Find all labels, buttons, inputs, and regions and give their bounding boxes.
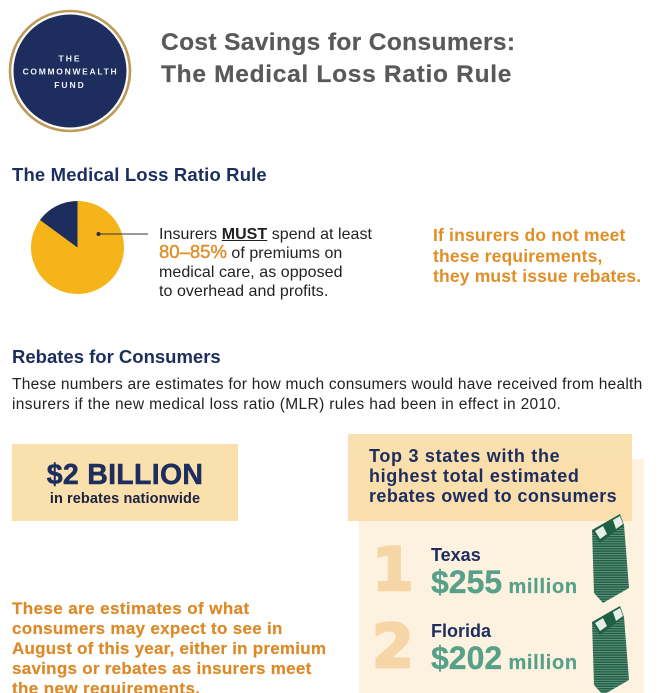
orange note: estimates: consumers may expect to see in [12,619,283,638]
rule explanation text [159,226,372,300]
rule explanation text: Insurers MUST spend at least [159,226,372,242]
caption: in rebates nationwide: in rebates nationwide [50,491,200,507]
icon: money stack 2 [592,606,629,693]
panel: top 3 states background [359,459,644,693]
rule explanation text: to overhead and profits. [159,282,328,300]
rank number 1: 1 [372,535,414,605]
leader line from pie to text [96,232,148,236]
icon: money stack 1 [592,514,629,603]
header text: highest total estimated [369,466,580,486]
amount: Texas: $255 million [431,564,578,600]
amount: Florida: $202 million [431,640,578,676]
title: The Medical Loss Ratio Rule [161,61,512,88]
orange note: estimates: savings or rebates as insurers meet [12,659,312,678]
rank number 2: 2 [372,612,414,682]
title: Cost Savings for Consumers: [161,29,515,56]
logo: The Commonwealth Fund: COMMONWEALTH [23,66,118,76]
pie chart: medical care share [31,201,124,294]
logo: The Commonwealth Fund [8,10,132,132]
state: Florida: Florida [431,621,491,641]
callout: rebates requirement: they must issue rebates. [433,266,641,286]
title [161,29,515,88]
header text: rebates owed to consumers [369,486,617,506]
logo: The Commonwealth Fund: THE [58,54,82,64]
panel: nationwide rebates [12,444,238,521]
callout: rebates requirement: these requirements, [433,246,603,266]
rebates description: These numbers are estimates for how much consumers would have received from health [12,376,642,393]
header text: Top 3 states with the [369,446,560,466]
callout: rebates requirement [433,225,641,286]
rebates description [12,376,642,412]
header text [369,446,617,506]
figure: $2 billion: $2 BILLION [47,459,203,491]
state: Texas: Texas [431,545,481,565]
heading: The Medical Loss Ratio Rule: The Medical Loss Ratio Rule [12,164,267,185]
orange note: estimates: These are estimates of what [12,599,250,618]
heading: Rebates for Consumers: Rebates for Consumers [12,346,221,367]
orange note: estimates: August of this year, either in premium [12,639,326,658]
rule explanation text: medical care, as opposed [159,264,343,280]
callout: rebates requirement: If insurers do not meet [433,225,626,245]
rebates description: insurers if the new medical loss ratio (MLR) rules had been in effect in 2010. [12,396,561,412]
rule explanation text: 80–85% of premiums on [159,240,342,262]
orange note: estimates [12,599,326,693]
panel: top 3 states header [348,434,632,521]
logo: The Commonwealth Fund: FUND [54,80,86,90]
